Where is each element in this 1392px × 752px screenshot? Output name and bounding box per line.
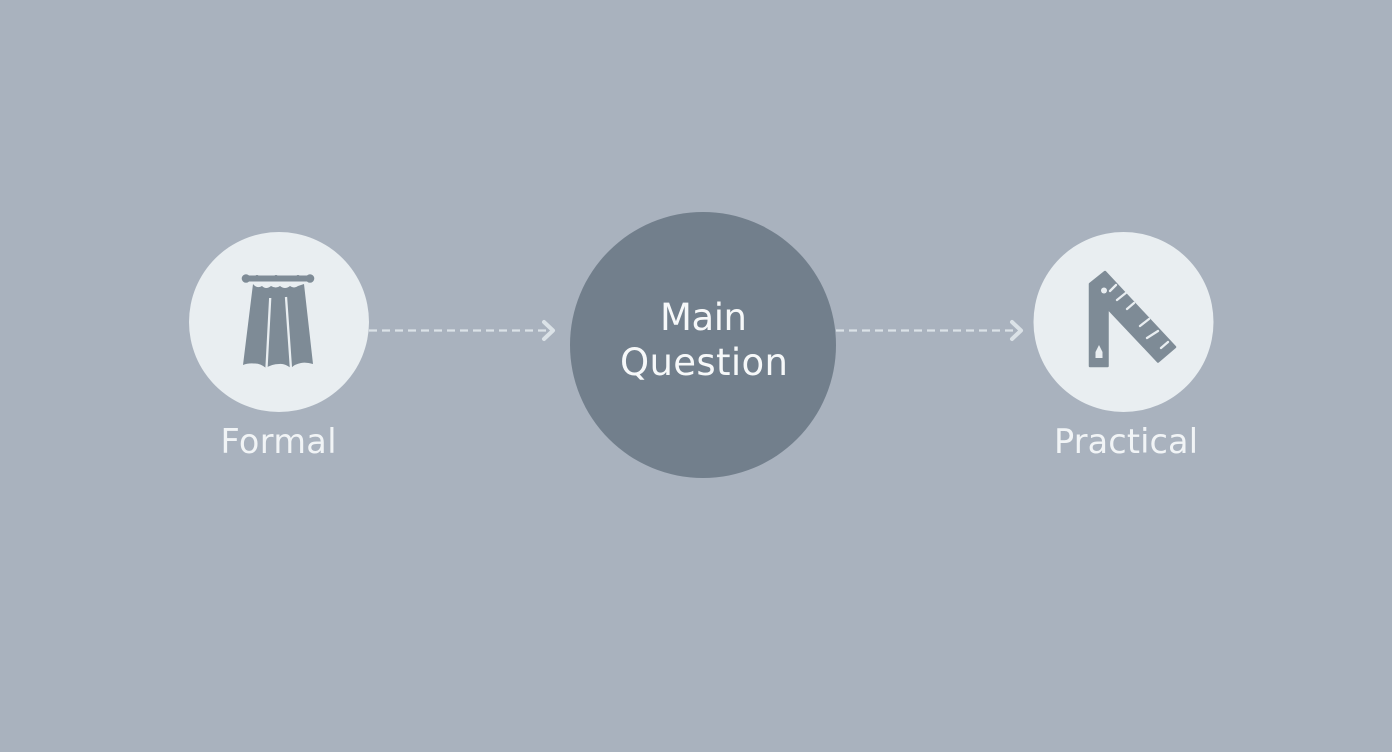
arrow: main question to practical: [836, 322, 1021, 339]
node: formal: [189, 232, 369, 461]
label: formal: Formal: [220, 422, 336, 461]
icon: curtain: [242, 274, 314, 369]
label: main question: Main: [660, 296, 747, 339]
node: practical: [1034, 232, 1214, 461]
main question circle: [570, 212, 836, 478]
label: main question: [620, 296, 788, 384]
arrow: formal to main question: [369, 322, 553, 339]
node: main question: [570, 212, 836, 478]
label: practical: Practical: [1054, 422, 1198, 461]
icon: set square ruler: [1090, 272, 1175, 366]
practical circle: [1034, 232, 1214, 412]
label: main question: Question: [620, 341, 788, 384]
formal circle: [189, 232, 369, 412]
